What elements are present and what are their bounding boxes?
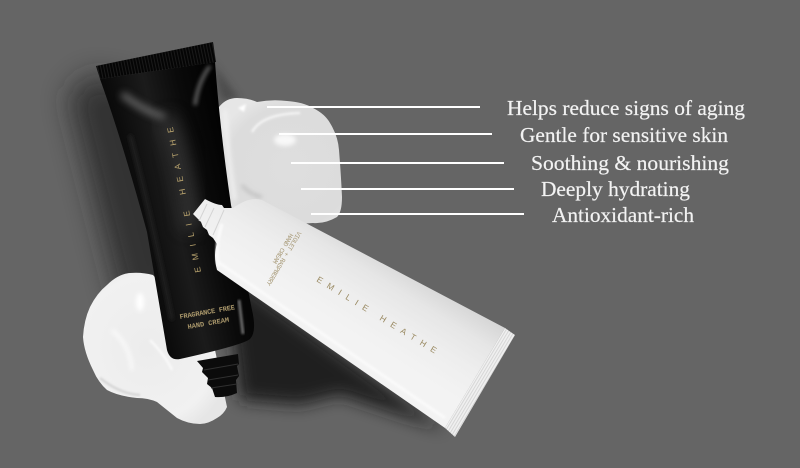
cream swatch: top xyxy=(212,98,342,224)
white tube brand: EMILIE HEATHE xyxy=(315,274,439,356)
black tube product name: FRAGRANCE FREE xyxy=(179,304,236,322)
white tube product name: HAND CREAM xyxy=(271,232,294,265)
cream swatch: bottom xyxy=(83,273,227,424)
benefit labels xyxy=(507,96,746,227)
black tube product name xyxy=(179,304,236,332)
label: hydrating: Deeply hydrating xyxy=(541,177,691,201)
label: soothing: Soothing & nourishing xyxy=(531,151,729,175)
label: aging: Helps reduce signs of aging xyxy=(507,96,746,120)
white tube product name: VIOLET + RASPBERRY xyxy=(264,230,302,287)
black tube product name: HAND CREAM xyxy=(187,317,230,332)
label: sensitive skin: Gentle for sensitive skin xyxy=(520,123,728,147)
product infographic xyxy=(56,42,745,437)
white tube xyxy=(193,199,515,437)
label: antioxidant: Antioxidant-rich xyxy=(552,203,695,227)
black tube body xyxy=(100,62,254,359)
white tube nozzle ribs xyxy=(199,204,224,235)
white tube body xyxy=(193,199,505,428)
callout lines xyxy=(267,106,524,215)
black tube crimp xyxy=(96,42,216,79)
shadows under products xyxy=(68,62,445,430)
black tube brand: EMILIE HEATHE xyxy=(165,126,203,274)
black tube highlights xyxy=(122,66,243,334)
white tube crimp xyxy=(445,328,515,437)
black tube neck xyxy=(197,354,239,397)
black tube xyxy=(96,42,254,397)
